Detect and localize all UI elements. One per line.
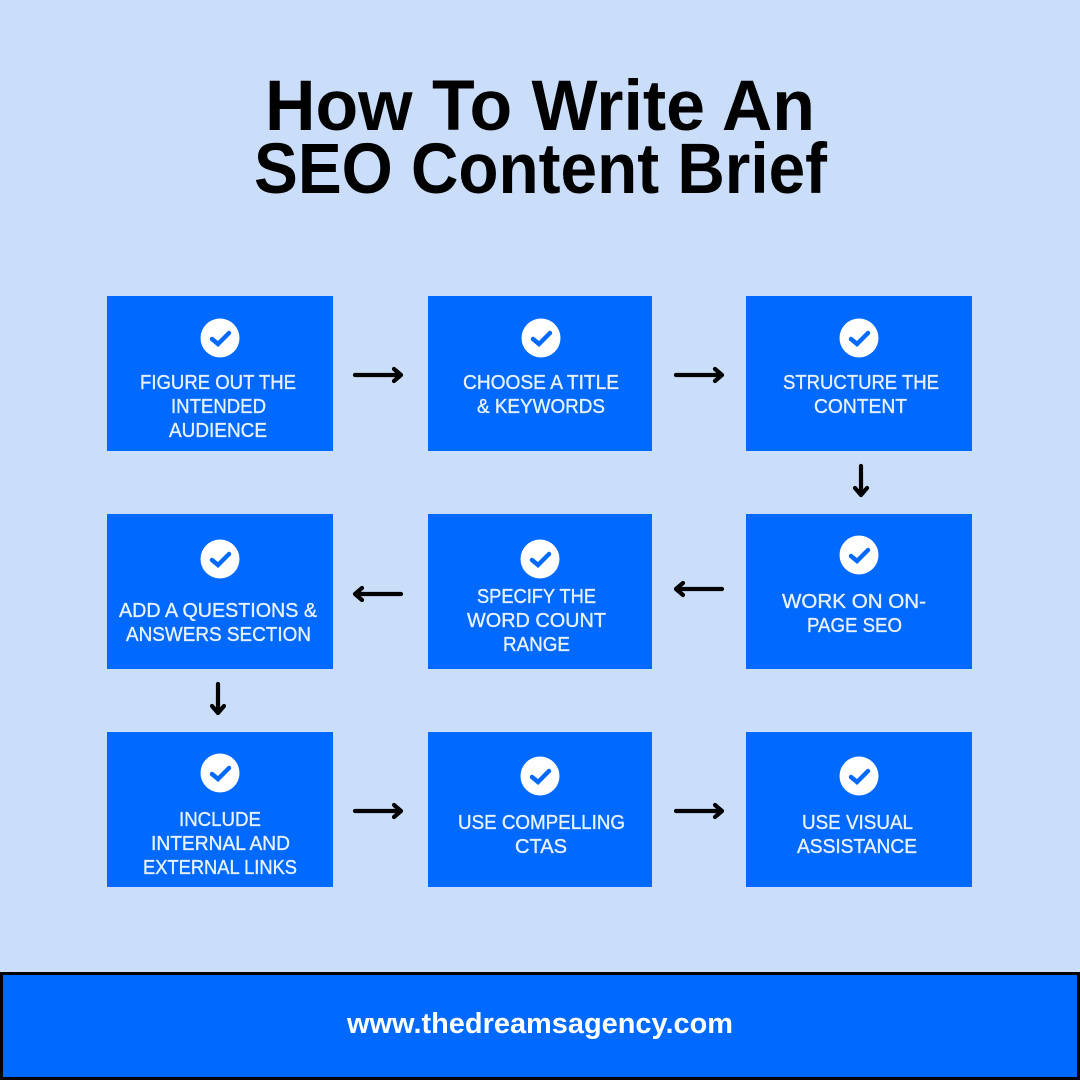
panel: choose a title and keywords [428, 296, 652, 451]
step text [467, 586, 606, 656]
panel: include internal and external links [107, 732, 333, 887]
step text: ANSWERS SECTION [126, 624, 311, 646]
icon: check circle [520, 540, 560, 578]
panel: work on on-page seo [746, 514, 972, 669]
step text: SPECIFY THE [477, 586, 596, 608]
step text: CTAS [515, 836, 567, 858]
step text: PAGE SEO [807, 615, 902, 637]
panel: add a questions and answers section [107, 514, 333, 669]
title: How To Write An [265, 67, 815, 146]
arrow: left [676, 583, 722, 595]
panel: figure out the intended audience [107, 296, 333, 451]
step text: INCLUDE [179, 809, 261, 831]
icon: check circle [520, 756, 560, 796]
panel: use visual assistance [746, 732, 972, 887]
title: SEO Content Brief [254, 130, 827, 209]
step text: USE VISUAL [802, 812, 913, 834]
icon: check circle [840, 536, 878, 574]
arrow: left [355, 588, 401, 600]
panel: use compelling ctas [428, 732, 652, 887]
step text [143, 809, 297, 879]
step text [782, 591, 926, 637]
icon: check circle [840, 756, 878, 796]
panel: specify the word count range [428, 514, 652, 669]
step text: WORD COUNT [467, 610, 606, 632]
panel: structure the content [746, 296, 972, 451]
icon: check circle [200, 318, 240, 358]
step text: INTERNAL AND [151, 833, 290, 855]
arrow: right [676, 369, 722, 381]
footer band [2, 974, 1078, 1078]
step text [458, 812, 625, 858]
step text: FIGURE OUT THE [140, 372, 296, 394]
arrow: down [855, 466, 867, 495]
icon: check circle [200, 754, 240, 792]
step text: CONTENT [814, 396, 907, 418]
step text: ADD A QUESTIONS & [119, 600, 318, 622]
arrow: down [212, 684, 224, 713]
step text: & KEYWORDS [477, 396, 605, 418]
icon: check circle [522, 318, 560, 358]
footer url: www.thedreamsagency.com [346, 1008, 733, 1040]
step text: USE COMPELLING [458, 812, 625, 834]
arrow: right [355, 805, 401, 817]
step text [140, 372, 296, 442]
step text: EXTERNAL LINKS [143, 857, 297, 879]
step text: AUDIENCE [169, 420, 267, 442]
step text [463, 372, 619, 418]
arrow: right [676, 805, 722, 817]
step text: STRUCTURE THE [783, 372, 939, 394]
step text [783, 372, 939, 418]
icon: check circle [200, 540, 240, 578]
title [254, 67, 827, 209]
step text: RANGE [503, 634, 570, 656]
step text: ASSISTANCE [797, 836, 917, 858]
step text [119, 600, 318, 646]
step text: INTENDED [171, 396, 266, 418]
icon: check circle [840, 318, 878, 358]
step text: WORK ON ON- [782, 591, 926, 613]
arrow: right [355, 369, 401, 381]
step text [797, 812, 917, 858]
step text: CHOOSE A TITLE [463, 372, 619, 394]
